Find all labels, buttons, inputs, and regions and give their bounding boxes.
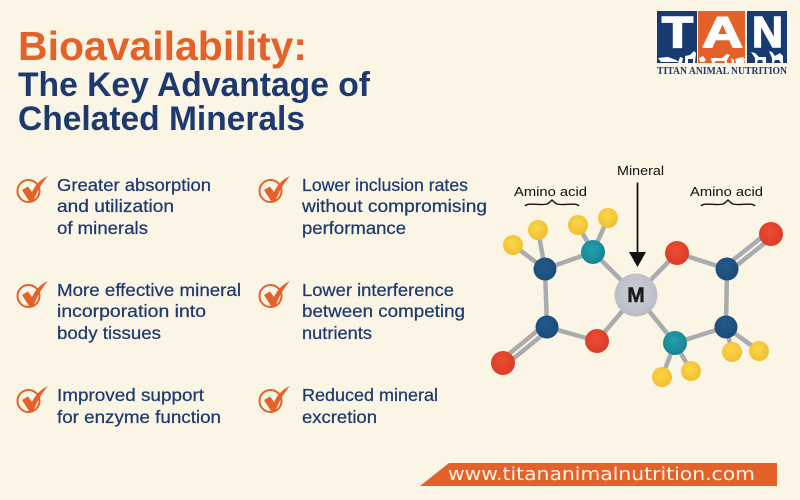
logo: Titan Animal Nutrition [657,8,788,77]
item: reduced excretion [260,385,438,427]
item: lower inclusion rates: without compromising [301,196,487,216]
website banner: www.titananimalnutrition.com [448,465,755,485]
item: enzyme function [18,385,221,427]
checklist: right column [260,175,487,427]
item: enzyme function: Improved support [57,385,204,405]
mineral atom M [614,274,658,316]
molecule diagram [491,163,783,387]
bonds [501,218,773,377]
item: lower interference [260,280,465,343]
item: lower inclusion rates [260,175,487,238]
item: enzyme function: for enzyme function [57,407,221,427]
title: Bioavailability: [18,23,307,69]
item: greater absorption: Greater absorption [57,175,211,195]
item: mineral incorporation: incorporation into [57,301,206,321]
item: reduced excretion: excretion [302,407,377,427]
label: amino acid left: Amino acid [514,184,587,199]
item: greater absorption: of minerals [57,218,148,238]
logo animals [658,51,783,63]
item: mineral incorporation [18,280,241,343]
logo: Titan Animal Nutrition: N [752,8,783,57]
item: lower interference: nutrients [302,323,372,343]
label: mineral with arrow [617,163,664,267]
website banner [420,463,777,486]
logo: Titan Animal Nutrition: T [662,8,693,57]
logo: Titan Animal Nutrition: TITAN ANIMAL NUTRITION [657,66,788,77]
item: greater absorption [18,175,211,238]
label: mineral with arrow: Mineral [617,163,664,178]
title: The Key Advantage of [18,66,371,104]
checklist: left column [18,175,241,427]
label: amino acid right: Amino acid [690,184,763,199]
item: reduced excretion: Reduced mineral [302,385,438,405]
item: lower inclusion rates: performance [302,218,406,238]
item: greater absorption: and utilization [57,196,174,216]
atoms [491,208,783,387]
item: lower inclusion rates: Lower inclusion rates [302,175,468,195]
label: amino acid left [514,184,587,206]
item: mineral incorporation: body tissues [57,323,161,343]
label: amino acid right [690,184,763,206]
item: lower interference: between competing [302,301,465,321]
item: lower interference: Lower interference [302,280,454,300]
mineral atom M: M [627,284,645,307]
item: mineral incorporation: More effective mineral [57,280,241,300]
title [18,23,371,138]
title: Chelated Minerals [18,100,305,138]
logo: Titan Animal Nutrition: A [702,8,743,57]
